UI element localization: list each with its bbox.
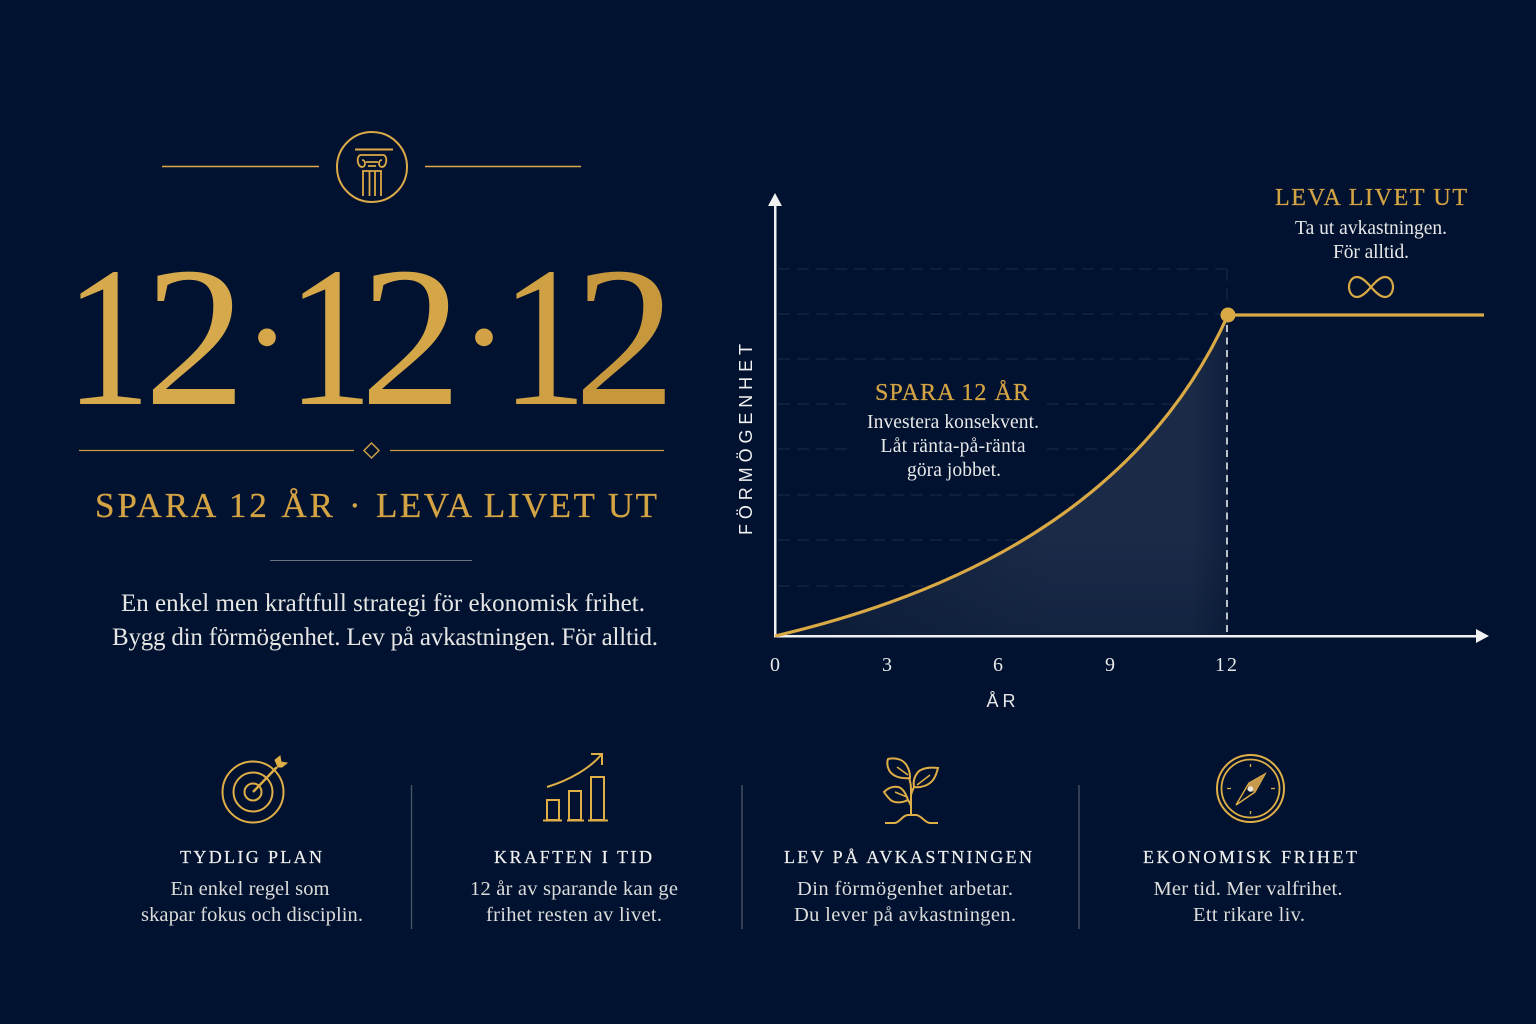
feature: lev på avkastningen — [784, 758, 1032, 926]
vertical marker at year 12 — [1226, 325, 1228, 635]
annotation: spara 12 år: göra jobbet. — [907, 460, 1001, 481]
feature: tydlig plan: TYDLIG PLAN — [180, 847, 322, 867]
x axis ticks: 12 — [1215, 654, 1239, 676]
feature: tydlig plan: skapar fokus och disciplin. — [141, 904, 363, 926]
feature: tydlig plan — [141, 756, 363, 926]
annotation: spara 12 år: SPARA 12 ÅR — [875, 380, 1029, 406]
grid lines — [778, 269, 1227, 586]
feature: ekonomisk frihet: Mer tid. Mer valfrihet. — [1154, 878, 1342, 900]
feature: lev på avkastningen: Din förmögenhet arbetar. — [797, 878, 1013, 900]
shaded area under curve — [775, 315, 1228, 636]
icon: compass — [1217, 755, 1284, 822]
feature: kraften i tid — [470, 754, 678, 926]
annotation: leva livet ut: LEVA LIVET UT — [1275, 185, 1467, 211]
annotation: leva livet ut: Ta ut avkastningen. — [1295, 218, 1447, 239]
intro text — [112, 590, 658, 651]
intro text: En enkel men kraftfull strategi för ekonomisk frihet. — [121, 590, 645, 617]
x axis ticks: 9 — [1105, 654, 1115, 676]
main title: 12·12·12: 2 — [144, 226, 246, 448]
main title: 12·12·12: 2 — [360, 226, 462, 448]
icon: target — [222, 756, 287, 822]
annotation: spara 12 år: Låt ränta-på-ränta — [880, 436, 1026, 457]
feature: ekonomisk frihet — [1143, 755, 1357, 926]
x axis ticks: 3 — [882, 654, 892, 676]
axes — [768, 193, 1489, 643]
subtitle — [95, 486, 657, 525]
icon: growth bars — [543, 754, 608, 820]
feature: tydlig plan: En enkel regel som — [170, 878, 330, 900]
x axis ticks: 6 — [993, 654, 1003, 676]
subtitle: · — [349, 486, 361, 525]
x axis label: ÅR — [986, 691, 1020, 711]
feature: kraften i tid: 12 år av sparande kan ge — [470, 878, 678, 900]
feature: kraften i tid: KRAFTEN I TID — [494, 847, 652, 867]
growth and plateau line — [775, 315, 1484, 636]
short divider — [270, 560, 472, 562]
x axis ticks — [770, 654, 1239, 676]
subtitle: SPARA 12 ÅR — [95, 486, 334, 525]
main title: 12·12·12: · — [459, 254, 509, 420]
main title: 12·12·12: 2 — [574, 226, 676, 448]
subtitle: LEVA LIVET UT — [376, 486, 657, 525]
feature: ekonomisk frihet: EKONOMISK FRIHET — [1143, 847, 1357, 867]
feature: lev på avkastningen: Du lever på avkastningen. — [794, 904, 1016, 926]
feature: lev på avkastningen: LEV PÅ AVKASTNINGEN — [784, 847, 1032, 867]
milestone dot — [1220, 308, 1236, 322]
y axis label: FÖRMÖGENHET — [736, 344, 756, 535]
feature row dividers — [412, 785, 1079, 929]
icon: sprout — [884, 758, 938, 823]
annotation: spara 12 år: Investera konsekvent. — [867, 412, 1039, 433]
chart: wealth curve — [736, 185, 1489, 711]
feature: kraften i tid: frihet resten av livet. — [486, 904, 662, 926]
annotation: leva livet ut — [1275, 185, 1467, 263]
main title: 12·12·12: · — [242, 254, 292, 420]
icon: infinity — [1349, 277, 1393, 297]
intro text: Bygg din förmögenhet. Lev på avkastningen. För alltid. — [112, 624, 658, 651]
x axis ticks: 0 — [770, 654, 780, 676]
main title: 12·12·12: 1 — [65, 227, 151, 448]
feature: ekonomisk frihet: Ett rikare liv. — [1193, 904, 1305, 926]
main title: 12·12·12: 1 — [287, 227, 373, 448]
annotation: leva livet ut: För alltid. — [1333, 242, 1409, 263]
header ornament: column emblem with rules — [162, 132, 581, 202]
main title: 12·12·12 — [65, 226, 676, 448]
annotation: spara 12 år — [867, 380, 1039, 481]
divider with diamond — [79, 443, 664, 458]
main title: 12·12·12: 1 — [501, 227, 587, 448]
